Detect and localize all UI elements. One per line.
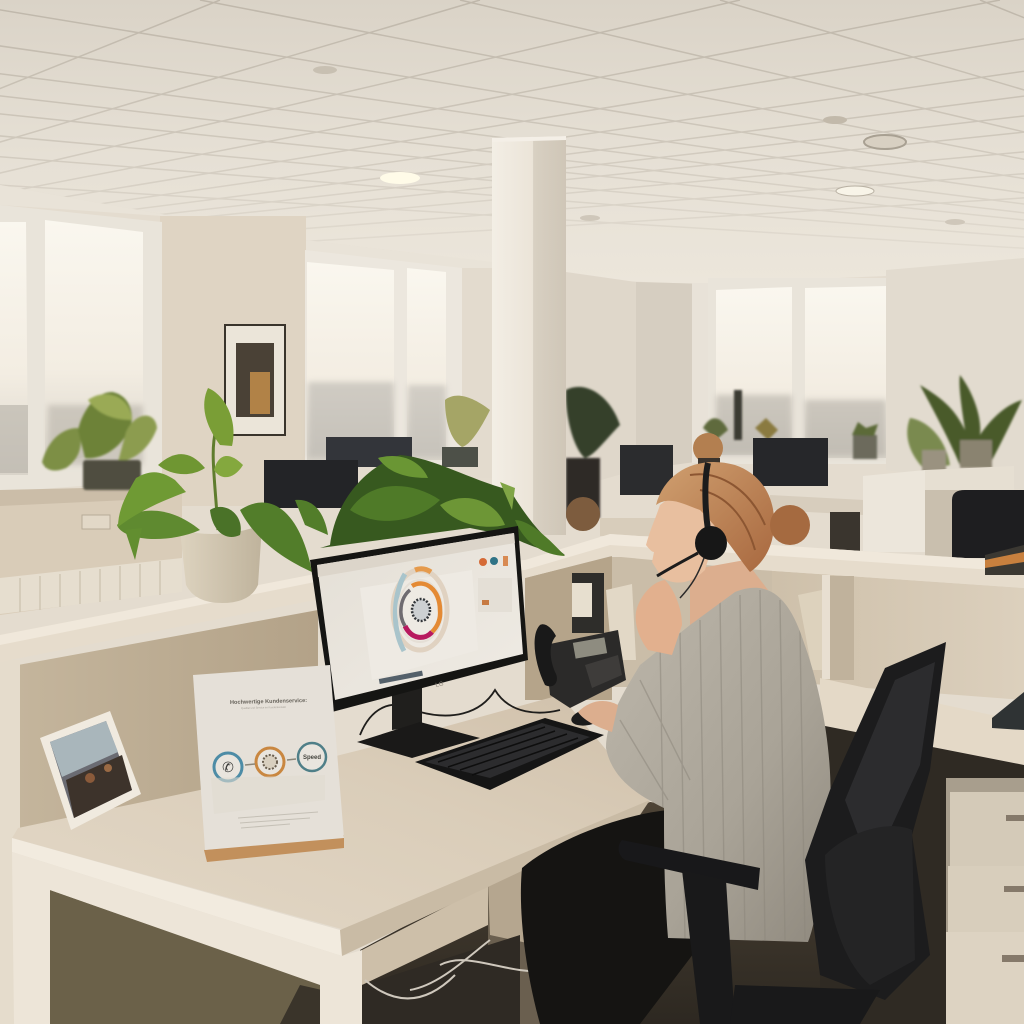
monitor brand: LG — [435, 681, 445, 689]
monitor stand — [392, 686, 422, 730]
monitor taskbar — [379, 671, 423, 684]
monitor bezel — [310, 526, 528, 712]
screen — [317, 533, 523, 700]
keyboard — [415, 718, 604, 790]
screen side icons — [478, 556, 512, 612]
flow icons: ✆ — [222, 759, 234, 775]
desk phone — [535, 624, 626, 708]
right wall — [886, 258, 1024, 490]
desk sign card: Qualitat und Service im Kundenkontakt — [241, 705, 286, 710]
background plants right — [566, 375, 1022, 518]
chair back — [805, 642, 946, 1000]
mouse — [570, 706, 606, 728]
shelf binders — [572, 573, 822, 670]
structural pillar — [492, 136, 566, 535]
plant pot — [180, 525, 262, 603]
filing drawers — [946, 778, 1024, 1024]
trousers — [521, 810, 700, 1024]
woman wearing headset — [521, 462, 831, 1024]
floor and under desk area — [50, 800, 960, 1024]
windowsill plant — [42, 392, 157, 490]
foreground potted plant — [117, 388, 328, 603]
middle window — [305, 250, 462, 465]
desk surface — [12, 695, 650, 1024]
ceiling with tile grid — [0, 0, 1024, 290]
monitor — [310, 526, 528, 758]
wall between windows — [160, 216, 306, 506]
armrest — [619, 840, 760, 890]
photo frame on desk — [40, 711, 141, 830]
flow icons — [214, 743, 326, 781]
neck — [690, 560, 768, 625]
left wall soffit — [0, 185, 492, 280]
partition ledge and panels — [0, 534, 1024, 1024]
headset — [657, 463, 727, 598]
flow icons: Speed — [303, 755, 321, 761]
far wall and corner — [566, 272, 710, 490]
hand near headset — [636, 580, 682, 655]
hand on mouse — [578, 701, 618, 732]
wall right of middle window — [458, 268, 498, 478]
plant behind monitor — [320, 455, 565, 556]
ceiling lights — [313, 66, 965, 225]
office chair — [619, 642, 946, 1024]
face — [646, 490, 720, 583]
sign title: Hochwertige Kundenservice: — [230, 698, 307, 706]
background office furniture — [566, 433, 1024, 558]
monitor cables — [360, 690, 560, 735]
window sill and radiator — [0, 486, 182, 615]
donut chart on screen — [393, 569, 447, 651]
plant leaves — [117, 388, 328, 572]
framed picture on wall — [225, 325, 285, 435]
desk sign card — [193, 665, 344, 862]
desk on the right — [820, 545, 1024, 1024]
left window — [0, 205, 162, 492]
right window — [708, 278, 888, 464]
sweater — [606, 588, 831, 942]
hair — [656, 462, 774, 572]
background small plant and monitor — [264, 396, 490, 508]
